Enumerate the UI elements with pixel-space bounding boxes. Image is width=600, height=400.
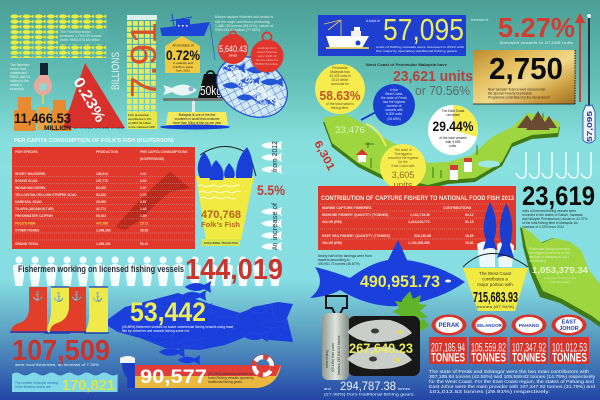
callout: terengganu: recorded the highest xyxy=(388,156,418,160)
icon: bucket handle xyxy=(200,146,256,176)
icon: parsley xyxy=(392,291,429,331)
icon: lifebuoy xyxy=(252,355,274,377)
text: can lid note: trawlers; 267,640.23 tonnes xyxy=(337,335,341,375)
text: GDP note xyxy=(127,112,157,129)
text: nearly half: trawlers amounting to xyxy=(318,258,350,262)
badge: east johor: TONNES xyxy=(552,352,587,364)
panel: 50kg scale: Malaysia is one of the few xyxy=(179,113,216,117)
badge: perak xyxy=(429,314,467,364)
table rows: OTHER FISHES xyxy=(15,228,40,232)
map: sabah sarawak xyxy=(520,227,600,327)
table rows: 50,544 xyxy=(96,214,106,218)
icon: boots: ⚓ xyxy=(92,291,104,302)
callout: west coast basket: contributes a xyxy=(482,276,508,282)
icon: small pond xyxy=(478,160,500,168)
icon: red ball inland: tonnes valued at xyxy=(256,58,278,62)
callout: terengganu: 3,605 xyxy=(392,170,414,180)
text: map note xyxy=(529,247,570,263)
text: ticket note: New 'sampan' licence were issued under xyxy=(488,88,546,92)
text: 57,095: 57,095 xyxy=(383,12,464,47)
callout: yellow 58.63%: Malaysia has xyxy=(330,70,350,74)
badge: selangor: 105,559.82 xyxy=(471,340,506,354)
table rows: 1,569,151 xyxy=(96,242,111,246)
icon: blue fish in bucket xyxy=(198,147,253,180)
text: 23,619 note: increase of 4.33% from 2012 xyxy=(522,225,564,229)
text: ticket note xyxy=(488,88,550,100)
callout: terengganu xyxy=(366,124,426,190)
text: 23,619 note xyxy=(522,209,588,229)
table rows: 25,999 xyxy=(96,200,106,204)
text: ticket note: Programme undertaken by the Government xyxy=(488,96,550,100)
text: marine capture xyxy=(215,15,273,32)
badge: selangor xyxy=(469,314,507,364)
text: can lid note xyxy=(325,335,341,375)
callout: terengganu: units xyxy=(393,180,413,190)
text: net tonnage: 1,488,700 TONNES xyxy=(223,59,283,108)
text: map note: the biggest contributor of fish xyxy=(529,251,570,255)
panel: folk's fish bucket xyxy=(196,146,256,246)
table rows: 107,776 xyxy=(96,179,108,183)
text: 294,787.38 traditional: 294,787.38 xyxy=(340,379,396,393)
callout: 50kg caption xyxy=(166,112,228,125)
text: 23,619 note: units of licensed fishing vessels were xyxy=(522,209,576,213)
text: 33,476: 33,476 xyxy=(335,125,365,136)
text: 294,787.38 traditional: tonnes xyxy=(398,386,410,391)
table rows: CONTRIBUTIONS xyxy=(443,206,472,210)
callout: east coast pie: The East Coast xyxy=(442,109,464,113)
text: 470,768 folk's fish: Folk's Fish xyxy=(201,222,240,229)
table rows: VALUE (RM) xyxy=(322,241,342,245)
table rows: 128,914 xyxy=(96,172,108,176)
icon: basket handle xyxy=(463,254,528,267)
callout: blue perak: number of xyxy=(387,104,401,108)
label: excluding trash fish xyxy=(202,239,240,246)
table rows: 1.76 xyxy=(140,193,147,197)
callout: blue perak xyxy=(361,84,415,126)
text: fishermen heading: Fishermen working on licensed fishing vessels xyxy=(18,264,184,274)
table rows: 15.82 xyxy=(465,241,474,245)
panel: traditional fishing boat xyxy=(120,355,281,388)
text: 23,619 note: recorded in the states of Sabah, Sarawak xyxy=(522,213,583,217)
callout: east coast pie: of the total vessels xyxy=(439,136,467,140)
table rows: SHORT MACKEREL xyxy=(15,172,46,176)
table header xyxy=(15,150,188,161)
callout: blue perak: West Coast, xyxy=(385,92,403,96)
callout: yellow 58.63%: fishing fleet. xyxy=(331,106,349,110)
text: fisheries sector: contributed xyxy=(10,71,27,75)
panel: gold ticket 2,750 xyxy=(473,50,575,104)
table rows: FRESHWATER CATFISH xyxy=(15,214,53,218)
table rows: INDIAN MACKEREL xyxy=(15,186,46,190)
table rows: FOLK'S FISH xyxy=(15,222,36,226)
icon: fish grid xyxy=(10,14,107,58)
table rows: DEEP SEA FISHERY QUANTITY (TONNES) xyxy=(322,234,390,238)
text: west coast heading: West Coast of Peninsular Malaysia have xyxy=(366,63,447,67)
text: school note: fish by seine/net and vessels fishing some ext. xyxy=(122,329,190,333)
badge: pahang: TONNES xyxy=(512,352,546,364)
panel: water 170,821: in the fisheries sector are xyxy=(15,385,51,389)
icon: palm trees xyxy=(365,113,543,178)
text: GDP note: or RM7.91 billion xyxy=(128,121,151,125)
badge: selangor: SELANGOR xyxy=(476,323,502,328)
text: boat note xyxy=(208,372,254,384)
text: ticket note: the Special Poverty Eradication xyxy=(488,92,533,96)
icon: red ball inland: Landings from xyxy=(257,46,277,50)
text: 23,619 note: of the total fishing fleet in Malaysia. An xyxy=(522,221,578,225)
text: fisheries sector: nation's xyxy=(10,83,22,87)
icon: red ball inland: inland fisheries xyxy=(257,50,278,54)
text: 23,619 note: and Wilayah Persekutuan Labuan or 41.37% xyxy=(522,217,588,221)
text: 294,787.38 traditional: (27.98%) from traditional fishing gears. xyxy=(324,392,415,396)
scale beam xyxy=(163,98,223,112)
text: state summary xyxy=(429,369,596,394)
text: school note xyxy=(122,325,234,333)
icon: hooks xyxy=(516,152,591,178)
callout: blue perak: In the xyxy=(390,88,398,92)
text: 11,466.53 million: 11,466.53 xyxy=(14,110,71,126)
table rows: GRAND TOTAL xyxy=(15,242,39,246)
callout: yellow 58.63%: accounts for xyxy=(331,82,350,86)
callout: yellow 58.63%: of the total nation's xyxy=(326,102,354,106)
text: state summary: 307,185.94 tonnes (42.92%) and 105,559.82 tonnes (14.75%) respectively xyxy=(429,374,596,379)
callout: yellow 58.63%: Peninsular xyxy=(332,66,349,70)
chart: red triangle: 0.23% xyxy=(70,74,109,125)
text: or 70.56%: or 70.56% xyxy=(415,84,470,98)
icon: boots: ⚓ xyxy=(53,291,65,302)
text: local fishermen note: were local fishermen, an increase of 7.35% xyxy=(15,363,100,367)
text: 7.91: 7.91 xyxy=(123,22,164,98)
heading: per capita consumption: PER CAPITA CONSUMPTION OF FOLK'S FISH (KG/PERSON) xyxy=(14,138,174,144)
table rows: ROUND SCAD xyxy=(15,179,38,183)
text: boat note: board fishing vessels operating xyxy=(208,376,254,380)
icon: oar xyxy=(583,14,595,143)
table rows: 36.69 xyxy=(140,228,148,232)
text: marine capture: Marine capture fisheries sub-sector is xyxy=(215,15,273,19)
text: fisheries sector: RM11,466.53 xyxy=(10,75,30,79)
callout: 0.72% tag xyxy=(165,36,200,73)
icon: row of people xyxy=(13,256,281,286)
chart: square grid xyxy=(127,21,157,112)
text: 5.5%: 5.5% xyxy=(257,182,285,198)
text: 11,466.53 million: MILLION xyxy=(44,126,71,132)
text: 1,053,379.34: 1,053,379.34 xyxy=(532,265,588,275)
map shadow xyxy=(115,172,190,230)
icon: outboard motor xyxy=(120,356,135,388)
icon: blue fishing boat xyxy=(160,14,215,60)
text: food fish sector: worth RM10,878.68 million xyxy=(60,38,100,42)
callout: 0.72% tag: 0.72% xyxy=(166,47,200,63)
icon: hand and ring xyxy=(34,63,52,104)
callout: yellow 58.63%: 2013 which xyxy=(332,78,349,82)
table rows: HARDTAIL SCAD xyxy=(15,200,42,204)
map: peninsular malaysia xyxy=(323,111,560,189)
callout: yellow 58.63% xyxy=(315,64,365,114)
text: 267,640.23: 267,640.23 xyxy=(349,340,413,356)
text: state summary: East Johor were the main provider with 107,347.92 tonnes (31.79%) and xyxy=(429,384,596,389)
callout: west coast basket: major portion with xyxy=(477,282,513,287)
callout: terengganu: East Coast with xyxy=(392,164,415,168)
text: net tonnage: RM5,935.97 MILLION xyxy=(225,70,270,108)
table header: PRODUCTION xyxy=(96,150,119,154)
text: 6,301: 6,301 xyxy=(311,139,337,173)
text: units licensed xyxy=(376,45,464,53)
badge: perak: PERAK xyxy=(438,323,460,329)
panel: 50kg scale xyxy=(160,71,230,130)
icon: sardines xyxy=(347,320,412,369)
callout: east coast pie xyxy=(428,105,478,155)
icon: boots: ⚓ xyxy=(32,290,44,301)
text: fisheries sector: The fisheries xyxy=(10,63,30,67)
table rows: MARINE CAPTURE FISHERIES xyxy=(322,206,372,210)
table rows: 52,816 xyxy=(96,193,106,197)
text: fisheries sector: economy. xyxy=(10,87,25,91)
table header: FISH SPECIES xyxy=(15,150,39,154)
callout: 0.72% tag: 4.44% in value xyxy=(173,65,193,69)
text: nearly half: 490,951.73 tonnes (46.67%) xyxy=(318,262,360,266)
icon: oar: 57,095 xyxy=(587,111,594,142)
icon: houses xyxy=(356,149,472,180)
panel: net and red balls xyxy=(206,32,298,129)
map: sabah sarawak: tonnes or 71.64% of the xyxy=(544,276,576,280)
table rows: VALUE (RM) xyxy=(322,220,342,224)
icon: 50kg weight: 50kg xyxy=(200,83,222,98)
text: state summary: for the West Coast. For the East Coast region, the states of Pahang and xyxy=(429,379,595,384)
callout: east coast pie: 29.44% xyxy=(432,118,474,134)
text: fisheries sector xyxy=(10,63,30,91)
table header: (KG/PERSONS) xyxy=(140,157,164,161)
badge: selangor: TONNES xyxy=(471,352,506,364)
text: GDP note: Fish production xyxy=(128,113,149,117)
callout: terengganu: The state of xyxy=(394,148,412,152)
text: food fish sector: The Food fish sector xyxy=(60,30,92,34)
text: map note: contributing xyxy=(529,259,546,263)
text: fisheries sector: million to the xyxy=(10,79,29,83)
text: boat note: (59.15%) fishermen worked on xyxy=(208,372,253,376)
panel: water 170,821: The number of people working xyxy=(15,381,58,385)
text: units licensed: units of fishing vessels were licensed in 2013 with xyxy=(376,45,464,49)
callout: 0.72% tag: in quantity and xyxy=(173,61,193,65)
callout: blue perak: has the highest xyxy=(383,100,405,104)
text: state summary: 101,012.53 tonnes (29.91%) respectively. xyxy=(429,389,550,394)
table rows: 61.13 xyxy=(465,220,474,224)
panel: state badges xyxy=(429,314,589,364)
text: boat note: traditional fishing gears. xyxy=(208,380,243,384)
table header: PER CAPITA CONSUMPTIONS xyxy=(140,150,188,154)
text: 11,466.53 million xyxy=(14,110,71,132)
text: 2,750: 2,750 xyxy=(489,51,563,86)
table rows: YELLOWTAIL/YELLOW STRIPED SCAD xyxy=(15,193,77,197)
text: 107,509: 107,509 xyxy=(12,335,110,367)
panel: 50kg scale: more than 50kg of fish pp per year xyxy=(173,121,222,125)
table rows: 328,180.66 xyxy=(414,234,431,238)
callout: blue perak: the state of Perak xyxy=(381,96,407,100)
callout: west coast basket: The West Coast xyxy=(479,271,512,276)
text: fisheries sector: sector had xyxy=(10,67,26,71)
table rows: 64.12 xyxy=(465,213,474,217)
table rows: 52.41 xyxy=(140,242,148,246)
panel: capture fishery table xyxy=(318,186,516,250)
icon: red ball inland xyxy=(250,32,284,72)
callout: yellow 58.63%: 58.63% xyxy=(320,88,361,103)
icon: red ball inland: RM557.93 million. xyxy=(255,62,279,66)
text: school note: (40.85%) fishermen worked on board commercial fishing vessels using trawl, xyxy=(122,325,234,329)
map: sabah sarawak: total fish landed xyxy=(549,280,571,284)
icon: red ball 5,640.43 xyxy=(218,32,248,64)
text: can lid note: seine fishing xyxy=(325,350,329,368)
callout: east coast pie: units. xyxy=(449,144,457,148)
text: from 2012: from 2012 xyxy=(270,141,279,172)
text: marine capture: RM5,935.97 million (77.85%). xyxy=(215,28,261,32)
text: 53,442: 53,442 xyxy=(130,297,206,327)
icon: fish school xyxy=(103,281,293,365)
badge: east johor: JOHOR xyxy=(559,326,579,332)
badge: east johor: EAST xyxy=(562,320,577,326)
icon: sardine can xyxy=(322,296,420,380)
callout: blue perak: vessels with xyxy=(385,108,403,112)
icon: red ball inland: were 5,640.43 xyxy=(257,54,277,58)
table rows xyxy=(322,206,474,245)
text: GDP note: contributed 1.1% xyxy=(128,117,151,121)
icon: can key xyxy=(326,296,347,314)
panel: school of fish xyxy=(103,281,293,365)
icon: white fish xyxy=(163,84,197,96)
badge: pahang xyxy=(510,314,548,364)
text: increase of: increase of xyxy=(270,202,279,240)
panel: boots and local fishermen xyxy=(10,287,118,394)
panel: 5.5% increase: An xyxy=(270,243,279,250)
arrow: red up arrow xyxy=(576,15,584,102)
callout: 0.72% tag: from 2012 xyxy=(176,68,190,72)
icon: boots xyxy=(10,287,109,333)
table rows: 470,768 xyxy=(96,222,108,226)
text: licensed vessels: licensed vessels to 57,095 units xyxy=(500,41,573,45)
table rows: 3.60 xyxy=(140,179,147,183)
text: 5.27%: 5.27% xyxy=(498,12,575,43)
text: 490,951.73: 490,951.73 xyxy=(360,272,440,291)
table rows: 18.65 xyxy=(465,234,474,238)
callout: 0.72% tag: An increase of xyxy=(172,44,194,48)
icon: coin stacks xyxy=(14,97,72,131)
table rows: 2.07 xyxy=(140,186,147,190)
text: a total of: A total of xyxy=(366,19,380,23)
table rows: 62,028 xyxy=(96,186,106,190)
panel: 57,095 vessels xyxy=(318,12,466,56)
table rows: TILAPIA (AKUAKULTUR) xyxy=(15,207,54,211)
icon: red ball 5,640.43: 5,640.43 xyxy=(219,44,247,54)
table rows: 1.69 xyxy=(140,214,147,218)
icon: boat hull xyxy=(135,365,281,388)
badge: east johor xyxy=(550,314,589,364)
table title: CONTRIBUTION OF CAPTURE FISHERY TO NATIONAL FOOD FISH 2013 xyxy=(321,196,515,202)
badge: perak: TONNES xyxy=(431,352,465,364)
label: billions: BILLIONS xyxy=(110,52,122,90)
badge: perak: 207,185.94 xyxy=(431,340,465,354)
panel: water 170,821: 170,821 xyxy=(62,377,115,394)
text: 294,787.38 traditional xyxy=(324,379,415,396)
text: marine capture: 1,488,700 tonnes (85.11%), valued at xyxy=(215,24,273,28)
icon: fishing net xyxy=(206,45,298,129)
table rows: 42,774 xyxy=(96,207,106,211)
icon: bucket xyxy=(196,176,254,240)
panel: folk's fish bucket: EXCLUDING TRASH FISH xyxy=(204,241,238,245)
callout: east coast pie: with 9,855 xyxy=(445,140,461,144)
table rows: 1,098,383 xyxy=(96,228,111,232)
icon: white trawler xyxy=(324,20,369,48)
icon: mountains xyxy=(517,111,557,130)
icon: boots: ⚓ xyxy=(71,290,83,301)
icon: big blue fish xyxy=(310,240,465,306)
icon: white fish column xyxy=(261,141,282,251)
panel: per capita table xyxy=(12,147,195,249)
text: nearly half xyxy=(318,254,372,266)
callout: east coast pie: recorded xyxy=(446,113,460,117)
panel: economy contribution xyxy=(10,63,125,132)
table rows: 4.31 xyxy=(140,172,147,176)
icon: red ball 5,640.43: tones xyxy=(229,54,238,58)
table rows xyxy=(15,172,148,246)
panel: 5.5% increase xyxy=(257,141,285,251)
callout: terengganu: Terengganu xyxy=(394,152,412,156)
text: 23,621 units: 23,621 units xyxy=(393,69,473,85)
text: food fish sector xyxy=(60,30,102,42)
callout: blue perak: (26.69%) xyxy=(387,117,401,121)
text: can lid note: (25.41%) from purse xyxy=(331,343,335,372)
text: map note: Peninsular Malaysia remains xyxy=(529,247,570,251)
text: 90,577: 90,577 xyxy=(140,367,207,388)
text: GDP note: to the national GDP xyxy=(128,125,155,129)
panel: 50kg scale: countries in world that consume xyxy=(175,117,220,121)
text: state summary: The state of Perak and Selangor were the two main contributors with xyxy=(429,369,590,374)
text: 294,787.38 traditional: and xyxy=(324,386,331,391)
badge: pahang: 107,347.92 xyxy=(512,340,546,354)
text: increase of: Increase of xyxy=(471,18,488,22)
text: 144,019: 144,019 xyxy=(185,254,283,286)
text: nearly half: Nearly half of the landings were from xyxy=(318,254,372,258)
text: 470,768 folk's fish xyxy=(201,209,241,229)
callout: blue perak: 6,305 units xyxy=(386,112,402,116)
table rows: 1,102,365,399 xyxy=(408,241,430,245)
table rows: INSHORE FISHERY QUANTITY (TONNES) xyxy=(322,213,388,217)
callout: yellow 58.63%: 33,476 units in xyxy=(329,74,351,78)
table rows: 1,154,719.36 xyxy=(410,213,430,217)
panel: water 170,821 xyxy=(12,372,118,394)
callout: terengganu: for the xyxy=(398,160,408,164)
table rows: 0.87 xyxy=(140,200,147,204)
text: 470,768 folk's fish: 470,768 xyxy=(201,209,241,221)
table rows: 1.43 xyxy=(140,207,147,211)
table rows: 15.72 xyxy=(140,222,148,226)
panel: fishermen headline xyxy=(13,254,283,286)
badge: pahang: PAHANG xyxy=(519,323,539,329)
text: food fish sector: produced 1,749,216 tonnes xyxy=(60,34,102,38)
text: marine capture: still the major contributor producing xyxy=(215,20,270,24)
callout: west coast basket: tonnes (67.94%) xyxy=(477,305,515,309)
callout: west coast basket: 715,683.93 xyxy=(473,289,518,306)
table rows: 4,413,049,779 xyxy=(408,220,430,224)
callout: west coast basket xyxy=(463,268,528,311)
icon: west coast hanging fish xyxy=(463,202,528,267)
panel: food fish sector xyxy=(10,14,108,58)
text: increase note: an increase of 0.23% on 2012 xyxy=(74,126,124,130)
panel: 7.91 billions xyxy=(110,15,164,129)
text: units licensed: the majority operating traditional fishing gears. xyxy=(376,49,458,53)
text: map note: landings in Malaysia in 2013 xyxy=(529,255,569,259)
